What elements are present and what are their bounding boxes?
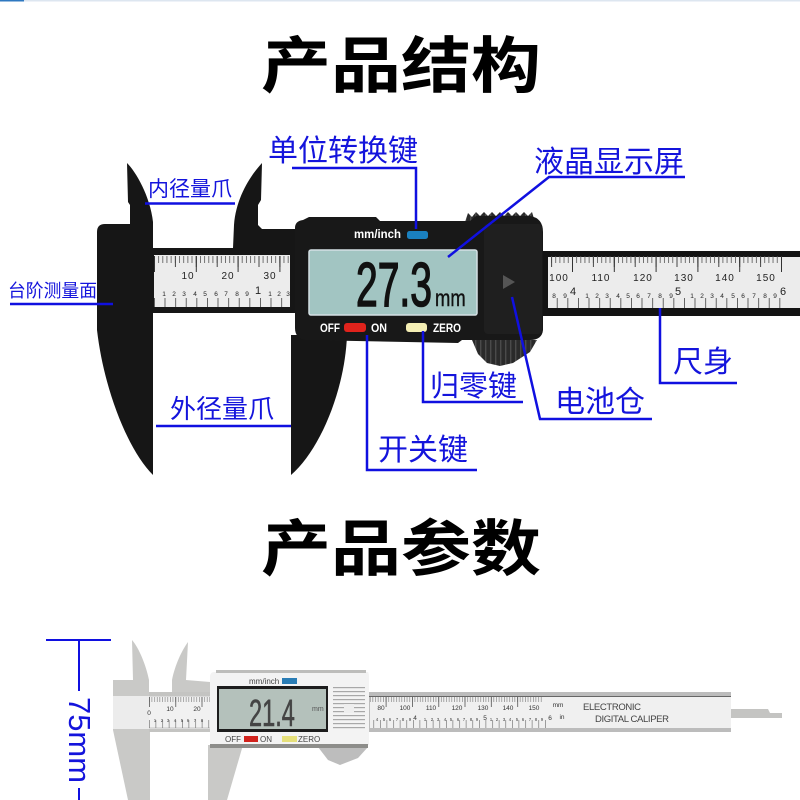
callout: inner jaw: 内径量爪 (148, 178, 232, 201)
callout: zero key: 归零键 (430, 370, 517, 403)
head top edge (216, 670, 366, 673)
knurled wheel top and bottom (465, 212, 537, 366)
beam right: 140 (503, 705, 514, 712)
callout: LCD screen (448, 146, 685, 257)
beam right: 8 (470, 717, 473, 722)
LCD reading: 21.4 (249, 691, 295, 734)
main scale right: 120 (633, 273, 653, 284)
LCD unit: mm (312, 706, 324, 713)
beam right: in (559, 714, 565, 721)
ON label: ON (260, 735, 272, 744)
unit button (282, 678, 297, 684)
callout: LCD screen: 液晶显示屏 (534, 146, 684, 179)
OFF label: OFF (225, 735, 241, 744)
beam right: mm (553, 702, 563, 709)
beam right: 80 (377, 705, 385, 712)
dimension: 75mm: 75mm (62, 697, 97, 783)
beam right: 120 (452, 705, 463, 712)
beam right: 3 (437, 717, 440, 722)
callout: outer jaw: 外径量爪 (170, 394, 274, 424)
beam right: 6 (389, 717, 392, 722)
display head (210, 671, 369, 748)
main scale right: 4 (616, 293, 620, 300)
beam right: 8 (402, 717, 405, 722)
moving jaw (291, 335, 347, 475)
beam right: 6 (457, 717, 460, 722)
depth beam right (540, 251, 800, 316)
silver caliper (113, 640, 782, 800)
beam right: 1 (490, 717, 493, 722)
main scale right: 2 (700, 293, 704, 300)
callout: battery compartment: 电池仓 (555, 386, 645, 419)
callout: zero key (423, 331, 523, 403)
sliding beam: 2 (161, 718, 164, 723)
main scale right: 110 (592, 273, 610, 284)
main scale right: 3 (605, 293, 609, 300)
sliding beam (113, 692, 210, 732)
ZERO label: ZERO (298, 735, 320, 744)
beam right: 6 (548, 715, 552, 722)
sliding beam: 7 (194, 718, 197, 723)
beam right: 2 (431, 717, 434, 722)
top edge strip (0, 0, 800, 2)
callout: power key: 开关键 (378, 434, 468, 467)
zero button (406, 323, 427, 332)
beam right: 4 (376, 717, 379, 722)
beam right: 9 (409, 717, 412, 722)
main scale right: 5 (675, 286, 681, 298)
beam right: 5 (383, 717, 386, 722)
sliding beam: 8 (201, 718, 204, 723)
title: product structure: 产品结构 (261, 32, 541, 100)
beam right: 7 (396, 717, 399, 722)
unit button (407, 231, 428, 239)
LCD frame (217, 686, 328, 732)
beam right: 7 (463, 717, 466, 722)
main scale right: 4 (720, 293, 724, 300)
main scale left: 9 (245, 291, 249, 298)
LCD glass (219, 689, 326, 729)
main scale left: 7 (224, 291, 228, 298)
black digital caliper (97, 163, 800, 475)
icon: battery arrow (503, 275, 515, 289)
beam right: 6 (522, 717, 525, 722)
main scale right: 8 (658, 293, 662, 300)
main scale right: 8 (552, 293, 556, 300)
callout: unit switch key: 单位转换键 (268, 135, 418, 168)
sliding beam: 10 (166, 706, 174, 713)
main scale left: 8 (235, 291, 239, 298)
beam right: 7 (529, 717, 532, 722)
beam right: 110 (426, 705, 437, 712)
main scale left: 1 (162, 291, 166, 298)
jaws (113, 640, 210, 800)
beam right: 1 (424, 717, 427, 722)
main scale right: 9 (773, 293, 777, 300)
main scale left: 3 (182, 291, 186, 298)
LCD unit: mm (435, 286, 466, 312)
grip lines (333, 687, 365, 731)
brand text: ELECTRONIC (583, 702, 641, 713)
beam right: 5 (450, 717, 453, 722)
beam right: 5 (516, 717, 519, 722)
beam right: 100 (400, 705, 411, 712)
beam right: 9 (541, 717, 544, 722)
power button (244, 736, 258, 742)
main scale right: 150 (756, 273, 776, 284)
moving jaw (208, 745, 243, 800)
main scale right: 6 (741, 293, 745, 300)
display head (295, 216, 543, 343)
ZERO label: ZERO (433, 321, 461, 335)
callout: power key (367, 335, 477, 470)
mm/inch label: mm/inch (354, 227, 401, 241)
brand text (583, 702, 669, 725)
main scale right: 140 (715, 273, 735, 284)
sliding beam: 3 (167, 718, 170, 723)
icon: arrow on grip (344, 704, 354, 713)
beam right: 2 (496, 717, 499, 722)
beam right: 9 (476, 717, 479, 722)
callout: ruler body: 尺身 (673, 346, 733, 379)
mm/inch label: mm/inch (249, 677, 279, 686)
beam right: 5 (483, 715, 487, 722)
main scale right: 2 (595, 293, 599, 300)
sliding beam: 6 (187, 718, 190, 723)
callout: unit switch key (268, 135, 418, 229)
main scale right: 9 (563, 293, 567, 300)
sliding beam: 20 (193, 706, 201, 713)
main scale right: 7 (752, 293, 756, 300)
callout: battery compartment (512, 297, 652, 419)
callout: step measuring face: 台阶测量面 (8, 281, 97, 301)
main scale left: 1 (268, 291, 272, 298)
zero button (282, 736, 297, 742)
main scale left: 2 (277, 291, 281, 298)
depth rod (731, 709, 782, 718)
main scale right (548, 256, 800, 308)
main scale right: 9 (669, 293, 673, 300)
main scale left: 3 (286, 291, 290, 298)
main scale right: 6 (780, 286, 786, 298)
head bottom shadow (210, 744, 368, 748)
main scale right: 7 (647, 293, 651, 300)
LCD reading: 27.3 (356, 250, 432, 319)
beam right: 4 (444, 717, 447, 722)
main scale right: 5 (626, 293, 630, 300)
sliding beam: 1 (154, 718, 157, 723)
main scale right: 4 (570, 286, 576, 298)
beam right (368, 692, 731, 732)
main scale right: 5 (731, 293, 735, 300)
LCD screen (309, 250, 477, 315)
main scale right: 100 (549, 273, 569, 284)
main scale left: 2 (172, 291, 176, 298)
callout: ruler body (660, 308, 737, 383)
main scale left: 5 (203, 291, 207, 298)
main scale left: 6 (214, 291, 218, 298)
sliding beam: 0 (147, 710, 151, 717)
power button (344, 323, 366, 332)
beam right: 4 (413, 715, 417, 722)
sliding beam: 4 (174, 718, 177, 723)
main scale right: 3 (710, 293, 714, 300)
main scale left: 4 (193, 291, 197, 298)
main scale right: 1 (585, 293, 589, 300)
beam right: 130 (478, 705, 489, 712)
main scale left: 10 (181, 271, 195, 282)
beam right: 4 (509, 717, 512, 722)
fixed jaws and frame (97, 163, 300, 475)
main scale right: 1 (690, 293, 694, 300)
main scale left: 1 (255, 285, 261, 297)
beam right: 8 (535, 717, 538, 722)
beam right: 150 (529, 705, 540, 712)
OFF label: OFF (320, 321, 340, 335)
main scale right: 8 (763, 293, 767, 300)
battery compartment panel (484, 224, 542, 334)
main scale left (154, 255, 290, 307)
sliding beam: 5 (181, 718, 184, 723)
main scale right: 6 (636, 293, 640, 300)
main scale left: 20 (221, 271, 235, 282)
brand text: DIGITAL CALIPER (595, 714, 669, 725)
beam right: 3 (503, 717, 506, 722)
thumb wheel (318, 747, 368, 765)
ON label: ON (371, 321, 387, 335)
main scale left: 30 (263, 271, 277, 282)
main scale right: 130 (674, 273, 694, 284)
title: product parameters: 产品参数 (261, 515, 541, 583)
dimension: 75mm (46, 640, 111, 800)
